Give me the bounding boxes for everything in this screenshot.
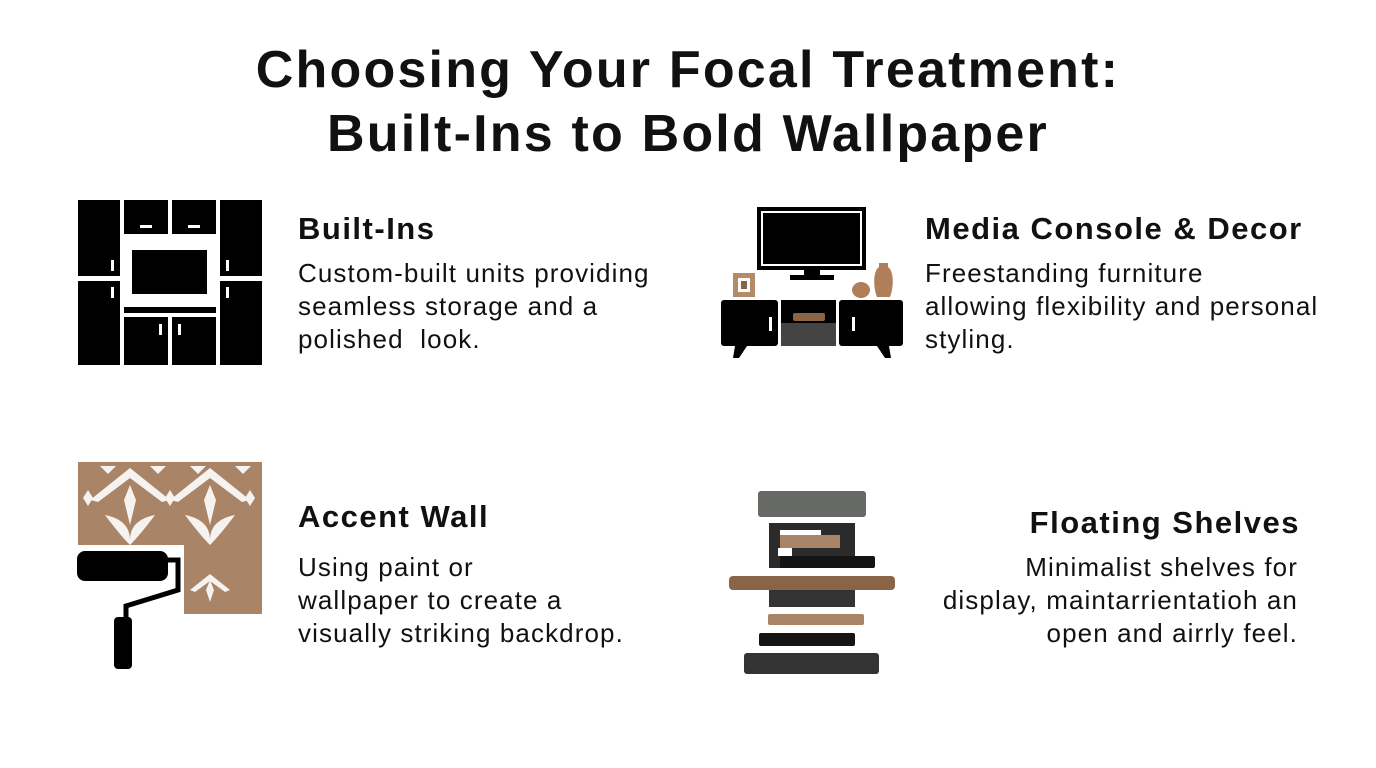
text: media console: styling. xyxy=(925,324,1015,354)
text: accent wall: Using paint or xyxy=(298,552,474,582)
text: accent wall: wallpaper to create a xyxy=(298,585,562,615)
text: media console: allowing flexibility and personal xyxy=(925,291,1318,321)
text: built-ins: seamless storage and a xyxy=(298,291,598,321)
title xyxy=(256,41,1120,163)
text: built-ins xyxy=(298,258,650,354)
text: floating shelves: display, maintarrientatioh an xyxy=(943,585,1298,615)
icon: wallpaper and roller xyxy=(77,462,262,669)
heading: floating shelves: Floating Shelves xyxy=(1030,505,1300,540)
icon: media console xyxy=(721,207,903,358)
title: Choosing Your Focal Treatment: xyxy=(256,41,1120,99)
text: media console xyxy=(925,258,1318,354)
heading: media console: Media Console & Decor xyxy=(925,211,1303,246)
text: floating shelves xyxy=(943,552,1298,648)
icon: floating shelves xyxy=(729,491,895,674)
text: accent wall xyxy=(298,552,624,648)
heading: accent wall: Accent Wall xyxy=(298,499,489,534)
text: built-ins: polished look. xyxy=(298,324,481,354)
text: accent wall: visually striking backdrop. xyxy=(298,618,624,648)
heading: built-ins: Built-Ins xyxy=(298,211,436,246)
icon: built-ins cabinet xyxy=(78,200,262,365)
text: built-ins: Custom-built units providing xyxy=(298,258,650,288)
text: media console: Freestanding furniture xyxy=(925,258,1204,288)
text: floating shelves: Minimalist shelves for xyxy=(1025,552,1298,582)
text: floating shelves: open and airrly feel. xyxy=(1047,618,1298,648)
title: Built-Ins to Bold Wallpaper xyxy=(327,105,1049,163)
